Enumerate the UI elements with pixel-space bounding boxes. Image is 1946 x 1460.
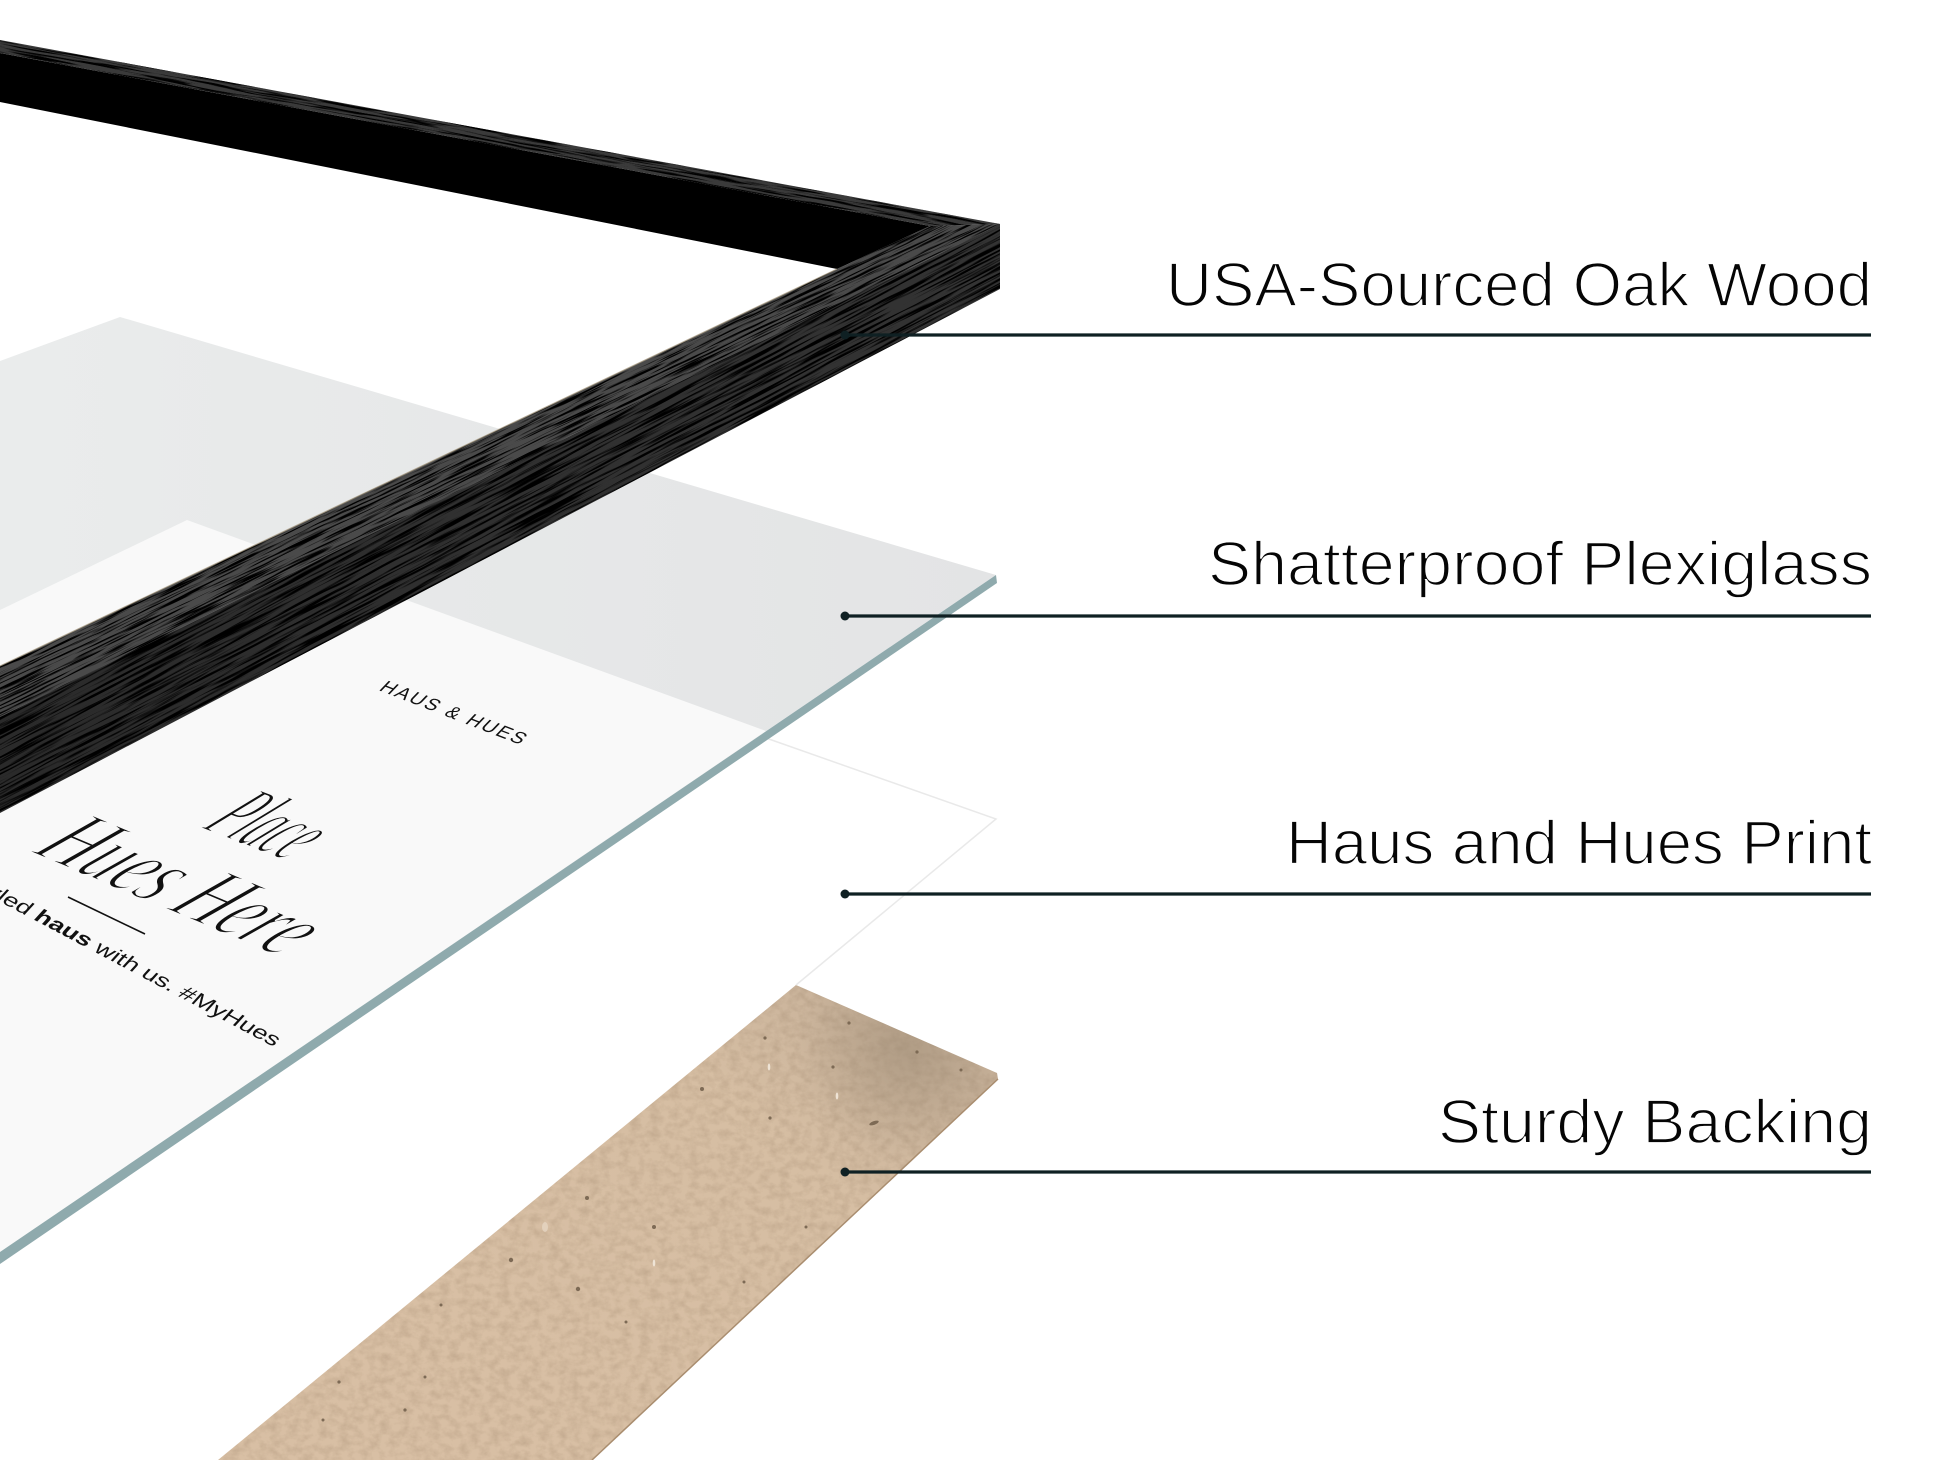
callout: Shatterproof Plexiglass: Shatterproof Plexiglass: [1208, 530, 1872, 599]
short divider: [68, 897, 145, 934]
callout: Sturdy Backing: [840, 1088, 1872, 1176]
panel: print sheet outline: [766, 738, 996, 985]
callout: Haus and Hues Print: [840, 809, 1872, 898]
panel: backing board layer: [218, 985, 998, 1460]
callout: Sturdy Backing: Sturdy Backing: [1438, 1088, 1872, 1157]
callouts: [840, 251, 1872, 1176]
callout: USA-Sourced Oak Wood: [840, 251, 1872, 340]
frame front face: [0, 224, 1000, 813]
panel: oak wood frame layer: [0, 40, 1000, 813]
frame back bar: [0, 40, 1000, 269]
callout: USA-Sourced Oak Wood: USA-Sourced Oak Wood: [1166, 251, 1872, 320]
glass edge: [0, 575, 997, 1264]
panel: poster artwork text: [0, 678, 532, 1050]
frame top face: [0, 224, 1000, 717]
callout: Shatterproof Plexiglass: [840, 530, 1872, 620]
script heading line one: Place: [180, 774, 364, 874]
callout: Haus and Hues Print: Haus and Hues Print: [1286, 809, 1872, 878]
script heading line two: Hues Here: [9, 798, 358, 971]
panel: plexiglass layer: [0, 317, 997, 1264]
poster brand name: HAUS & HUES: [375, 678, 532, 748]
print seen through the glass: [0, 520, 766, 1252]
